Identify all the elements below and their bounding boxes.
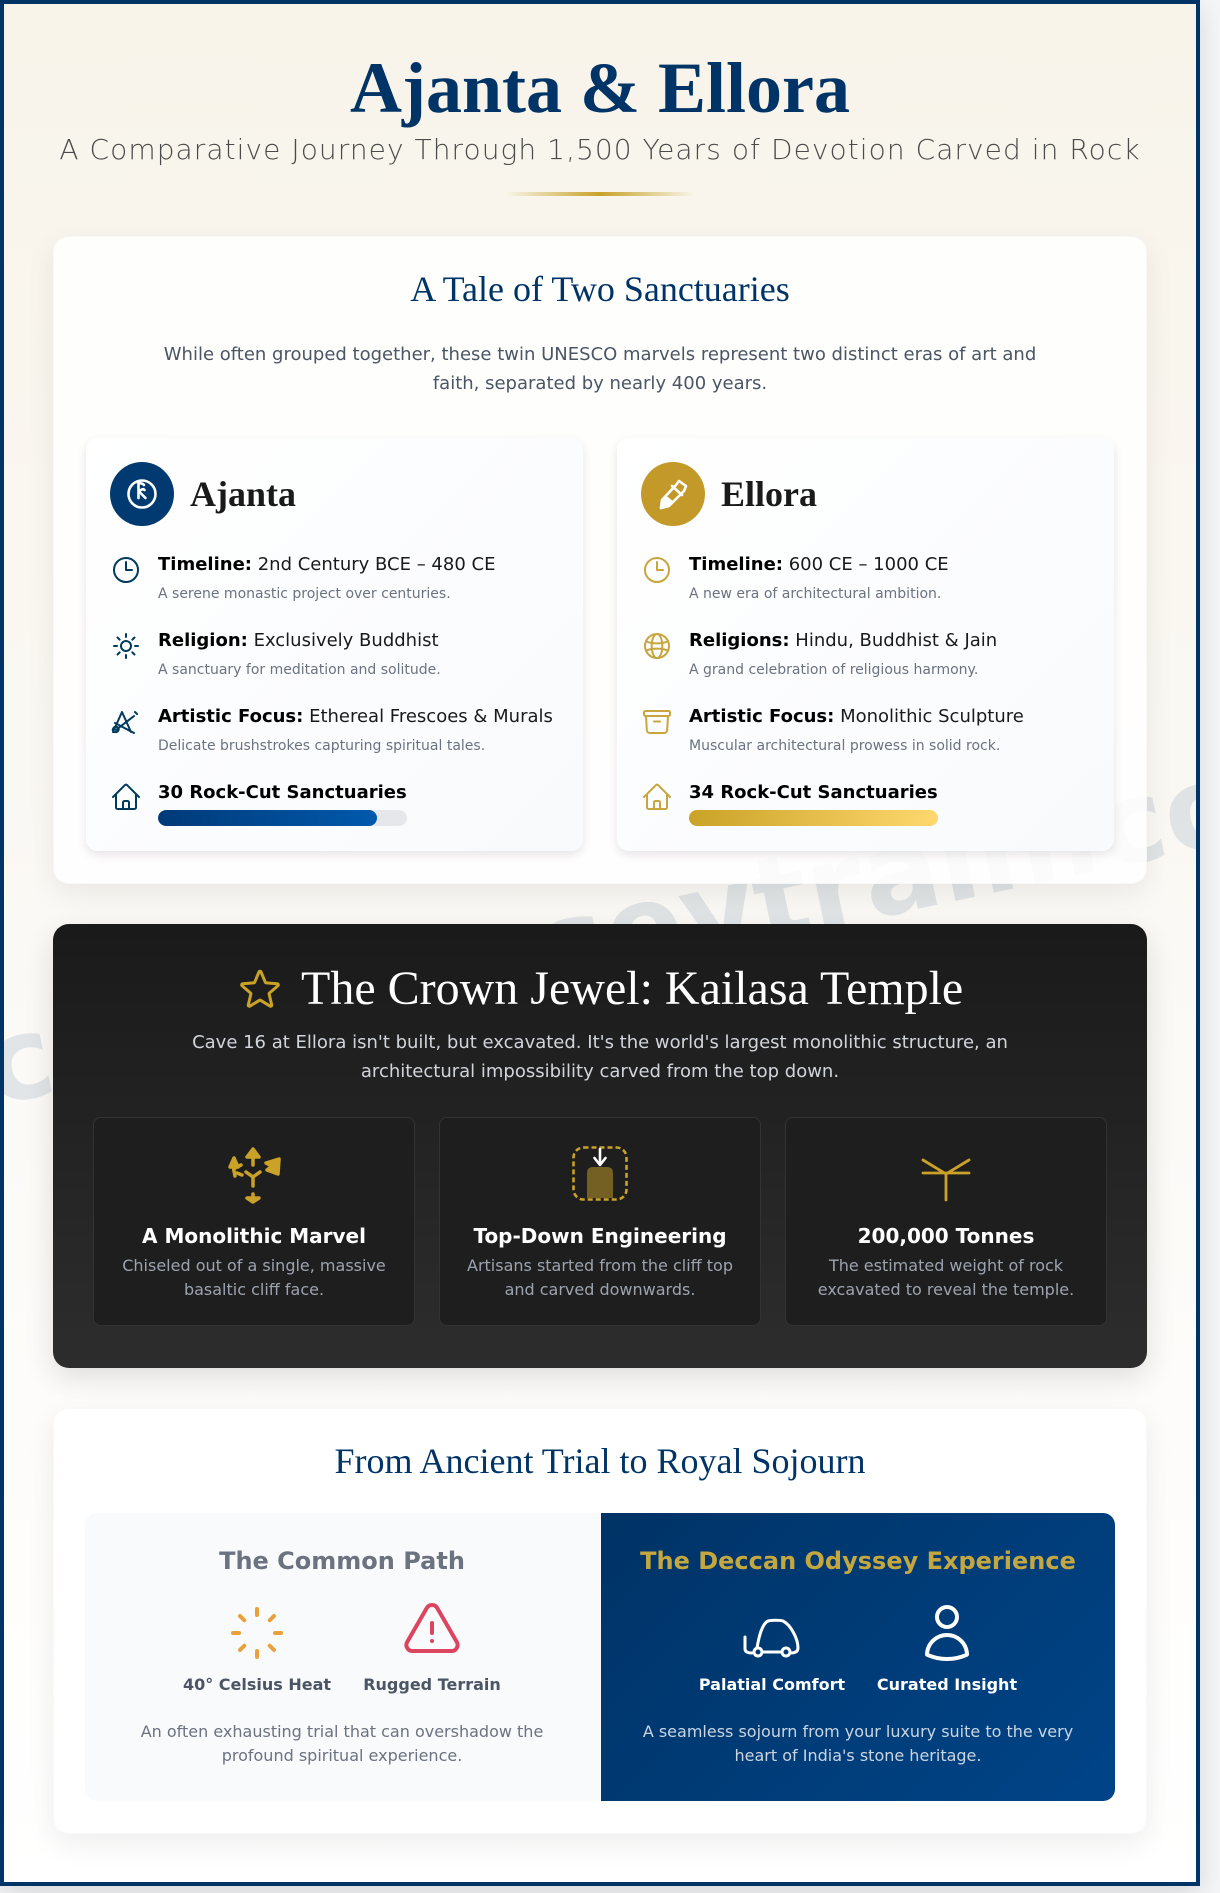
tonnes description: excavated to reveal the temple. xyxy=(818,1280,1074,1299)
marvel description: Chiseled out of a single, massive xyxy=(122,1256,386,1275)
intro text xyxy=(164,344,1036,394)
title: Ajanta & Ellora xyxy=(350,48,850,128)
Ajanta timeline: Timeline: 2nd Century BCE – 480 CE xyxy=(158,554,495,575)
insight label: Curated Insight xyxy=(877,1675,1017,1694)
tonnes description: The estimated weight of rock xyxy=(829,1256,1063,1275)
marvel description: basaltic cliff face. xyxy=(184,1280,324,1299)
Ellora count: 34 Rock-Cut Sanctuaries xyxy=(689,782,938,803)
Ajanta count: 30 Rock-Cut Sanctuaries xyxy=(158,782,407,803)
Kailasa heading: The Crown Jewel: Kailasa Temple xyxy=(301,962,963,1015)
Ajanta name: Ajanta xyxy=(190,474,296,514)
panel: Ajanta xyxy=(86,438,583,851)
panel: common path xyxy=(85,1513,601,1801)
subtitle: A Comparative Journey Through 1,500 Years of Devotion Carved in Rock xyxy=(59,133,1141,166)
Ellora artistic focus: Artistic Focus: Monolithic Sculpture xyxy=(689,706,1024,727)
panel: Ellora xyxy=(617,438,1114,851)
icon: clock gold xyxy=(644,557,670,583)
intro text: faith, separated by nearly 400 years. xyxy=(433,373,767,394)
Deccan Odyssey title: The Deccan Odyssey Experience xyxy=(640,1547,1076,1575)
engineering description: Artisans started from the cliff top xyxy=(467,1256,733,1275)
engineering description xyxy=(467,1256,733,1299)
Ajanta progress bar xyxy=(158,810,407,826)
Ellora name: Ellora xyxy=(721,474,817,514)
Deccan Odyssey text: A seamless sojourn from your luxury suite to the very xyxy=(643,1722,1073,1741)
Ellora progress bar xyxy=(689,810,938,826)
Deccan Odyssey text xyxy=(643,1722,1073,1765)
icon: person xyxy=(925,1605,969,1661)
intro text: While often grouped together, these twin UNESCO marvels represent two distinct eras of art and xyxy=(164,344,1036,365)
icon: globe xyxy=(644,633,670,659)
Ajanta timeline note: A serene monastic project over centuries. xyxy=(158,586,451,602)
icon: carriage xyxy=(744,1618,800,1658)
Ellora religions: Religions: Hindu, Buddhist & Jain xyxy=(689,630,997,651)
panel: a tale of two sanctuaries xyxy=(53,236,1147,894)
Ajanta religion note: A sanctuary for meditation and solitude. xyxy=(158,662,441,678)
icon: archive box xyxy=(643,710,671,734)
card: 200,000 tonnes xyxy=(785,1117,1107,1326)
panel background xyxy=(53,236,1147,884)
title underline xyxy=(505,192,695,196)
terrain label: Rugged Terrain xyxy=(363,1675,501,1694)
engineering title: Top-Down Engineering xyxy=(473,1224,727,1248)
engineering description: and carved downwards. xyxy=(505,1280,695,1299)
common path text: profound spiritual experience. xyxy=(222,1746,462,1765)
icon: warning xyxy=(404,1603,460,1653)
panel: Kailasa Temple xyxy=(53,924,1147,1368)
icon: house gold xyxy=(643,784,671,810)
Ellora religions note: A grand celebration of religious harmony. xyxy=(689,662,978,678)
icon: excavation xyxy=(572,1146,628,1201)
Ellora artistic note: Muscular architectural prowess in solid rock. xyxy=(689,738,1000,754)
icon: scale xyxy=(922,1158,970,1202)
icon: heat xyxy=(231,1607,283,1659)
Kailasa intro xyxy=(192,1032,1008,1082)
heading: A Tale of Two Sanctuaries xyxy=(410,269,790,309)
marvel title: A Monolithic Marvel xyxy=(142,1224,366,1248)
card: top-down engineering xyxy=(439,1117,761,1326)
tonnes description xyxy=(818,1256,1074,1299)
icon: sun xyxy=(113,633,139,659)
Ellora timeline note: A new era of architectural ambition. xyxy=(689,586,941,602)
comfort label: Palatial Comfort xyxy=(699,1675,845,1694)
panel: Deccan Odyssey xyxy=(601,1513,1115,1801)
icon: Ajanta badge xyxy=(110,462,174,526)
marvel description xyxy=(122,1256,386,1299)
icon: star xyxy=(240,970,280,1008)
comparison heading: From Ancient Trial to Royal Sojourn xyxy=(334,1441,866,1481)
Kailasa intro: Cave 16 at Ellora isn't built, but excavated. It's the world's largest monolithic structure, an xyxy=(192,1032,1008,1053)
common path text xyxy=(140,1722,543,1765)
icon: house xyxy=(112,784,140,810)
panel: from ancient trial to royal sojourn xyxy=(53,1408,1147,1834)
Ajanta artistic focus: Artistic Focus: Ethereal Frescoes & Murals xyxy=(158,706,553,727)
Deccan Odyssey text: heart of India's stone heritage. xyxy=(735,1746,981,1765)
icon: brush xyxy=(112,711,138,734)
Kailasa intro: architectural impossibility carved from the top down. xyxy=(361,1061,839,1082)
Ajanta artistic note: Delicate brushstrokes capturing spiritual tales. xyxy=(158,738,485,754)
common path text: An often exhausting trial that can overshadow the xyxy=(141,1722,543,1741)
heat label: 40° Celsius Heat xyxy=(183,1675,331,1694)
card: monolithic marvel xyxy=(93,1117,415,1326)
icon: Ellora badge xyxy=(641,462,705,526)
Ellora timeline: Timeline: 600 CE – 1000 CE xyxy=(689,554,949,575)
Ajanta religion: Religion: Exclusively Buddhist xyxy=(158,630,439,651)
icon: monolith arrows xyxy=(228,1147,281,1204)
common path title: The Common Path xyxy=(219,1547,465,1575)
icon: clock xyxy=(113,557,139,583)
tonnes title: 200,000 Tonnes xyxy=(858,1224,1034,1248)
